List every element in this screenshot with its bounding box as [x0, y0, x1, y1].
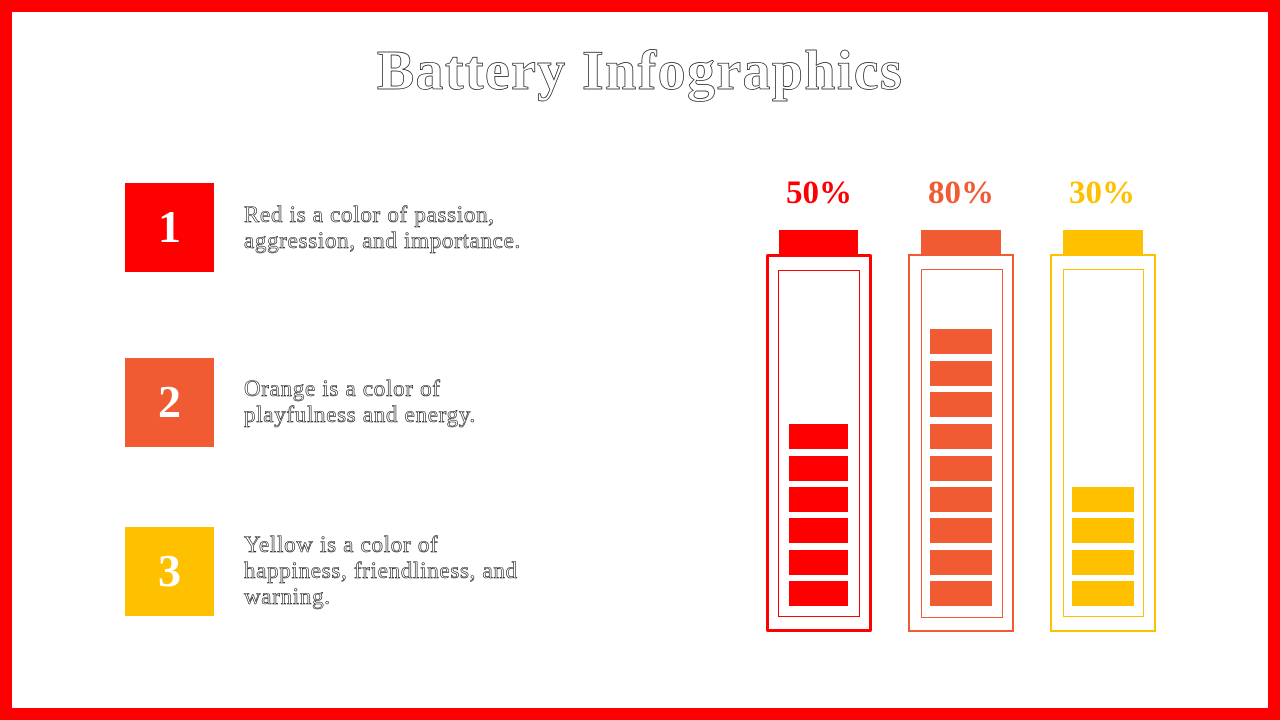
orange battery percentage: 80%: [928, 175, 994, 211]
title: Battery Infographics: [377, 40, 903, 102]
yellow battery: [1050, 230, 1156, 632]
yellow battery casing: [1050, 254, 1156, 632]
item 2 text: Orange is a color of: [244, 376, 441, 401]
yellow battery inner outline: [1063, 269, 1144, 617]
item 3 number badge: [125, 527, 214, 616]
yellow battery cells: [1072, 487, 1134, 606]
red battery inner outline: [778, 270, 860, 617]
red battery casing: [766, 254, 872, 632]
yellow battery percentage: 30%: [1069, 175, 1135, 211]
item 1 number badge: 1: [158, 201, 181, 252]
item 2 text: playfulness and energy.: [244, 402, 476, 427]
item 2 text: [244, 376, 476, 428]
item 3 text: [244, 532, 518, 610]
yellow battery cap: [1063, 230, 1143, 255]
orange battery cells: [930, 329, 992, 606]
red battery cells: [789, 424, 848, 606]
orange battery inner outline: [921, 269, 1003, 618]
item 3 number badge: 3: [158, 545, 181, 596]
orange battery: [908, 230, 1014, 632]
red battery cap: [779, 230, 858, 255]
red battery percentage: 50%: [786, 175, 852, 211]
item 1 text: [244, 202, 521, 254]
item 1 text: Red is a color of passion,: [244, 202, 495, 227]
item 3 text: warning.: [244, 584, 331, 609]
red battery: [766, 230, 872, 632]
item 1 number badge: [125, 183, 214, 272]
item 3 text: happiness, friendliness, and: [244, 558, 518, 583]
orange battery cap: [921, 230, 1001, 255]
orange battery casing: [908, 254, 1014, 632]
item 3 text: Yellow is a color of: [244, 532, 438, 557]
item 2 number badge: 2: [158, 376, 181, 427]
item 2 number badge: [125, 358, 214, 447]
item 1 text: aggression, and importance.: [244, 228, 521, 253]
